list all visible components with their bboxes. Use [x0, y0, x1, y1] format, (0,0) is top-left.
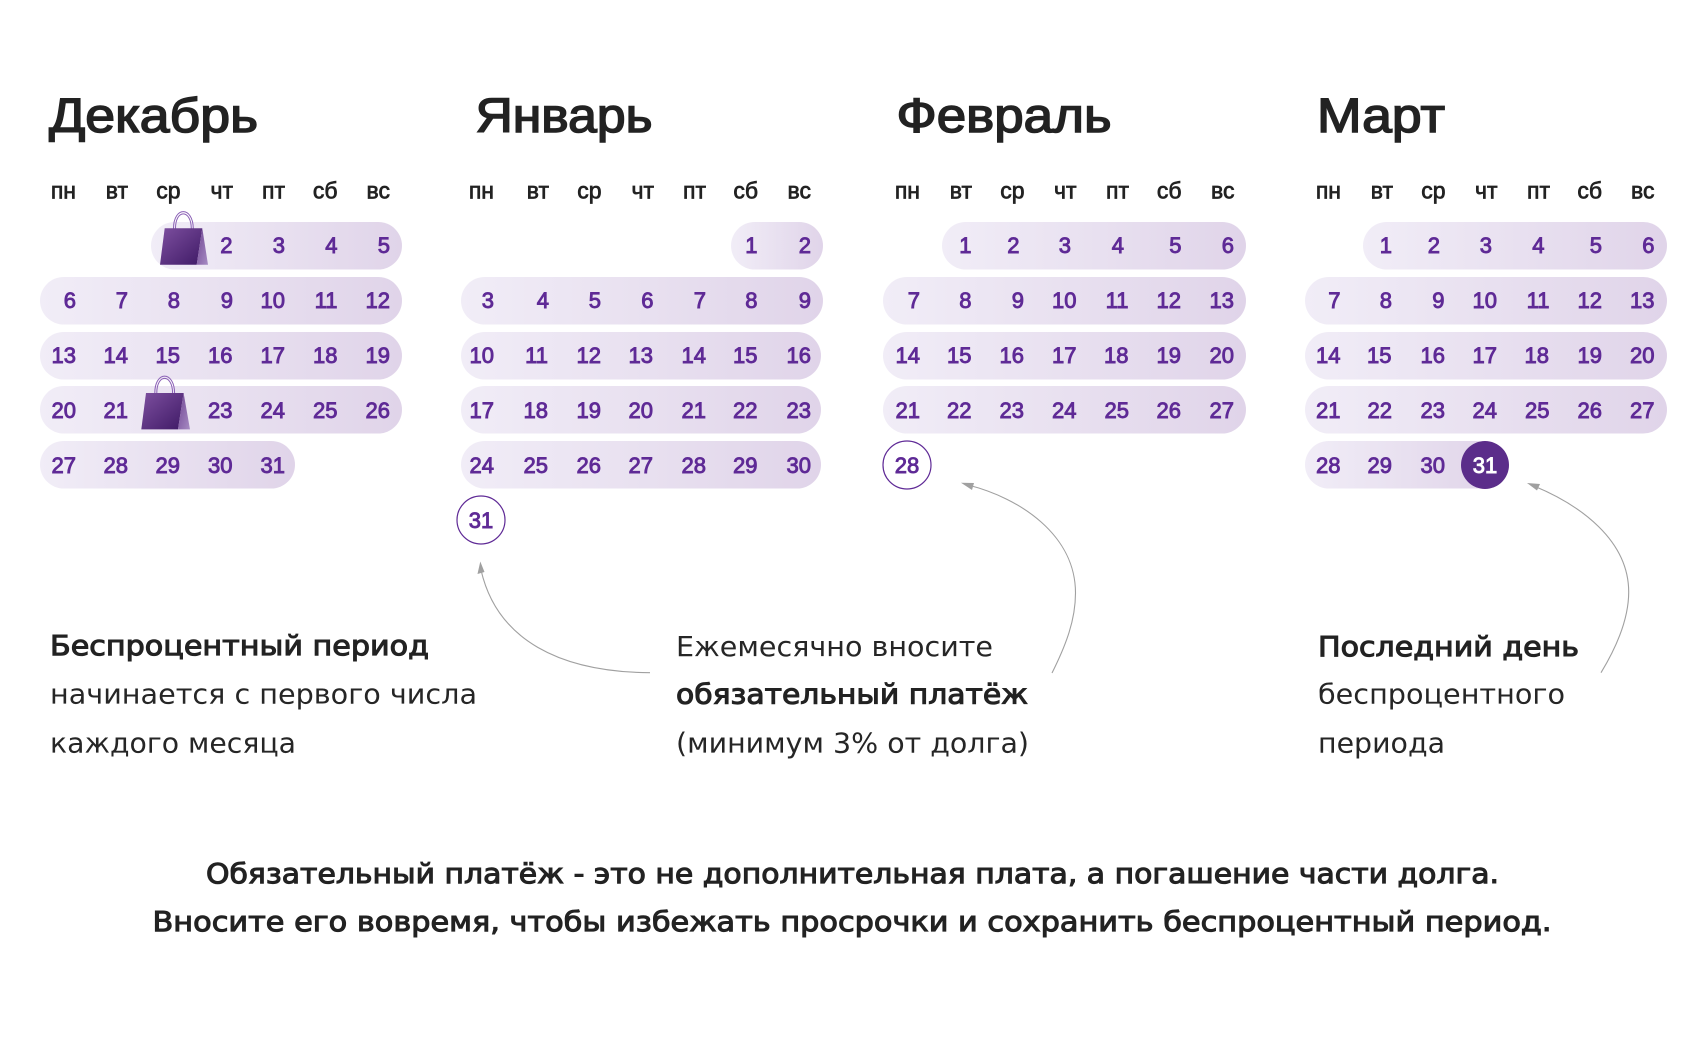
dates: 7	[116, 288, 128, 313]
dates: 12	[1157, 288, 1181, 313]
dates: 23	[208, 398, 232, 423]
dates: 12	[366, 288, 390, 313]
date pills	[1305, 222, 1667, 488]
weekday header: ср	[1421, 178, 1446, 204]
dates: 8	[959, 288, 972, 313]
dates: 27	[629, 453, 653, 478]
arrow: to February 28	[961, 483, 1076, 673]
dates: 15	[156, 343, 180, 368]
dates: 20	[1210, 343, 1234, 368]
dates: 27	[52, 453, 76, 478]
text block: interest-free period start: каждого месяца	[50, 726, 296, 760]
weekday header: вс	[367, 178, 390, 204]
dates: 5	[1590, 233, 1602, 258]
dates: 25	[524, 453, 548, 478]
text block: interest-free period start: Беспроцентный период	[50, 629, 429, 662]
dates: 14	[1316, 343, 1340, 368]
dates: 12	[1578, 288, 1602, 313]
text block: monthly payment: (минимум 3% от долга)	[676, 726, 1029, 760]
dates: 2	[799, 233, 811, 258]
dates: 30	[787, 453, 811, 478]
dates: 2	[1007, 233, 1020, 258]
dates: 14	[896, 343, 920, 368]
dates: 6	[64, 288, 76, 313]
dates: 17	[1473, 343, 1497, 368]
icon: shopping bag on December 1	[160, 212, 208, 265]
dates	[52, 233, 390, 478]
heading: February: Февраль	[896, 90, 1112, 143]
dates: 3	[482, 288, 494, 313]
dates: 2	[1428, 233, 1440, 258]
weekday header: пт	[1106, 178, 1129, 204]
weekday header: вт	[950, 178, 972, 204]
dates: 18	[313, 343, 338, 368]
marker: January 31	[457, 496, 505, 544]
dates: 10	[1052, 288, 1076, 313]
text block: last day: беспроцентного	[1318, 678, 1565, 710]
dates: 4	[1532, 233, 1544, 258]
weekday header: вт	[1371, 178, 1393, 204]
dates: 15	[1367, 343, 1392, 368]
weekday header: пт	[683, 178, 706, 204]
dates: 6	[1642, 233, 1654, 258]
dates: 16	[787, 343, 811, 368]
dates: 5	[589, 288, 601, 313]
dates: 7	[1328, 288, 1340, 313]
dates: 3	[1480, 233, 1492, 258]
text block: interest-free period start	[50, 629, 477, 760]
marker: March 31 last day: 31	[1473, 453, 1497, 478]
weekday header: чт	[1475, 178, 1498, 204]
weekday header: пт	[1527, 178, 1550, 204]
dates: 8	[168, 288, 180, 313]
footer note: Обязательный платёж - это не дополнительная плата, а погашение части долга.	[206, 857, 1499, 890]
dates: 12	[577, 343, 601, 368]
dates: 19	[366, 343, 390, 368]
footer note	[152, 857, 1552, 938]
date pills	[883, 222, 1246, 434]
text block: monthly payment: Ежемесячно вносите	[676, 630, 993, 663]
dates: 9	[1432, 288, 1444, 313]
dates: 15	[947, 343, 972, 368]
dates: 10	[470, 343, 494, 368]
weekday header: пн	[51, 178, 76, 204]
weekday header: ср	[1000, 178, 1024, 204]
weekday header: вс	[1211, 178, 1234, 204]
dates: 26	[366, 398, 390, 423]
panel: February calendar	[883, 90, 1246, 489]
weekday header: сб	[733, 178, 758, 204]
weekday header: пн	[469, 178, 494, 204]
weekday header: вс	[788, 178, 811, 204]
dates: 27	[1630, 398, 1654, 423]
dates: 26	[577, 453, 601, 478]
heading: December: Декабрь	[49, 90, 258, 143]
dates: 1	[745, 233, 758, 258]
dates: 26	[1578, 398, 1602, 423]
dates: 11	[1527, 288, 1550, 313]
dates: 23	[1000, 398, 1024, 423]
weekday header: чт	[1054, 178, 1077, 204]
dates: 6	[1222, 233, 1234, 258]
dates: 9	[1012, 288, 1024, 313]
weekday header: вс	[1631, 178, 1654, 204]
weekday header	[469, 178, 811, 204]
dates: 22	[947, 398, 972, 423]
dates: 25	[1525, 398, 1550, 423]
weekday header: сб	[313, 178, 338, 204]
arrow: to January 31	[478, 562, 650, 673]
dates: 17	[470, 398, 494, 423]
dates: 1	[959, 233, 972, 258]
dates: 13	[629, 343, 653, 368]
dates: 22	[733, 398, 758, 423]
dates	[1316, 233, 1654, 478]
dates: 15	[733, 343, 758, 368]
dates: 30	[208, 453, 232, 478]
dates: 9	[799, 288, 811, 313]
dates: 21	[896, 398, 920, 423]
dates: 16	[208, 343, 232, 368]
dates: 5	[378, 233, 390, 258]
weekday header: сб	[1577, 178, 1602, 204]
dates	[896, 233, 1234, 423]
dates: 31	[261, 453, 285, 478]
dates: 11	[525, 343, 548, 368]
dates: 19	[1157, 343, 1181, 368]
dates: 18	[1104, 343, 1128, 368]
dates: 28	[682, 453, 706, 478]
heading: March: Март	[1317, 90, 1445, 143]
dates: 9	[221, 288, 233, 313]
text block: last day	[1318, 630, 1579, 760]
dates: 24	[261, 398, 285, 423]
marker: March 31 last day	[1461, 441, 1509, 489]
dates: 10	[261, 288, 285, 313]
panel: March calendar	[1305, 90, 1667, 489]
marker: February 28	[883, 441, 931, 489]
dates: 7	[908, 288, 920, 313]
weekday header: вт	[106, 178, 128, 204]
weekday header: сб	[1157, 178, 1182, 204]
dates: 20	[52, 398, 76, 423]
dates: 23	[787, 398, 811, 423]
dates: 21	[104, 398, 128, 423]
weekday header	[895, 178, 1234, 204]
dates: 30	[1421, 453, 1445, 478]
weekday header: ср	[156, 178, 180, 204]
dates: 28	[1316, 453, 1340, 478]
weekday header	[1316, 178, 1654, 204]
dates: 19	[1578, 343, 1602, 368]
dates: 20	[1630, 343, 1654, 368]
text block: monthly payment	[676, 630, 1029, 760]
footer note: Вносите его вовремя, чтобы избежать просрочки и сохранить беспроцентный период.	[152, 905, 1552, 938]
dates: 5	[1169, 233, 1182, 258]
dates: 2	[220, 233, 232, 258]
weekday header: ср	[577, 178, 602, 204]
weekday header: пт	[262, 178, 285, 204]
weekday header: чт	[631, 178, 654, 204]
panel: January calendar	[457, 90, 823, 544]
dates: 18	[524, 398, 548, 423]
dates: 8	[745, 288, 758, 313]
dates: 23	[1421, 398, 1445, 423]
dates: 10	[1473, 288, 1497, 313]
dates: 21	[1316, 398, 1340, 423]
dates: 19	[577, 398, 601, 423]
dates: 4	[1112, 233, 1124, 258]
weekday header: пн	[895, 178, 920, 204]
dates: 17	[261, 343, 285, 368]
text block: monthly payment: обязательный платёж	[676, 678, 1028, 710]
weekday header: вт	[527, 178, 549, 204]
date pills	[461, 222, 823, 488]
dates: 4	[325, 233, 338, 258]
text block: last day: Последний день	[1318, 630, 1579, 663]
dates: 21	[682, 398, 706, 423]
marker: February 28: 28	[895, 453, 919, 478]
dates: 24	[1473, 398, 1497, 423]
dates: 13	[1210, 288, 1234, 313]
dates: 29	[1368, 453, 1392, 478]
marker: January 31: 31	[469, 508, 493, 533]
dates: 8	[1380, 288, 1392, 313]
dates: 25	[313, 398, 338, 423]
dates: 14	[104, 343, 128, 368]
dates: 16	[1421, 343, 1445, 368]
dates: 13	[1630, 288, 1654, 313]
date pills	[40, 222, 402, 488]
dates: 6	[641, 288, 654, 313]
dates: 11	[1106, 288, 1128, 313]
dates: 24	[1052, 398, 1076, 423]
dates: 13	[52, 343, 76, 368]
dates: 14	[682, 343, 706, 368]
dates: 4	[537, 288, 549, 313]
dates: 20	[629, 398, 653, 423]
icon: shopping bag on December 22	[141, 376, 190, 429]
heading: January: Январь	[476, 90, 652, 143]
arrow: to March 31	[1527, 483, 1629, 673]
weekday header: чт	[210, 178, 233, 204]
dates: 29	[733, 453, 758, 478]
dates: 24	[470, 453, 494, 478]
dates: 11	[315, 288, 338, 313]
dates: 27	[1210, 398, 1234, 423]
dates	[470, 233, 811, 478]
dates: 22	[1368, 398, 1392, 423]
weekday header	[51, 178, 390, 204]
dates: 7	[694, 288, 706, 313]
dates: 18	[1525, 343, 1549, 368]
dates: 16	[1000, 343, 1024, 368]
weekday header: пн	[1316, 178, 1341, 204]
dates: 1	[1380, 233, 1392, 258]
panel: December calendar	[40, 90, 402, 488]
text block: last day: периода	[1318, 726, 1445, 760]
dates: 3	[1059, 233, 1071, 258]
text block: interest-free period start: начинается с первого числа	[50, 678, 477, 710]
dates: 28	[104, 453, 128, 478]
dates: 26	[1157, 398, 1181, 423]
dates: 25	[1105, 398, 1129, 423]
dates: 3	[273, 233, 285, 258]
dates: 29	[156, 453, 180, 478]
dates: 17	[1052, 343, 1076, 368]
